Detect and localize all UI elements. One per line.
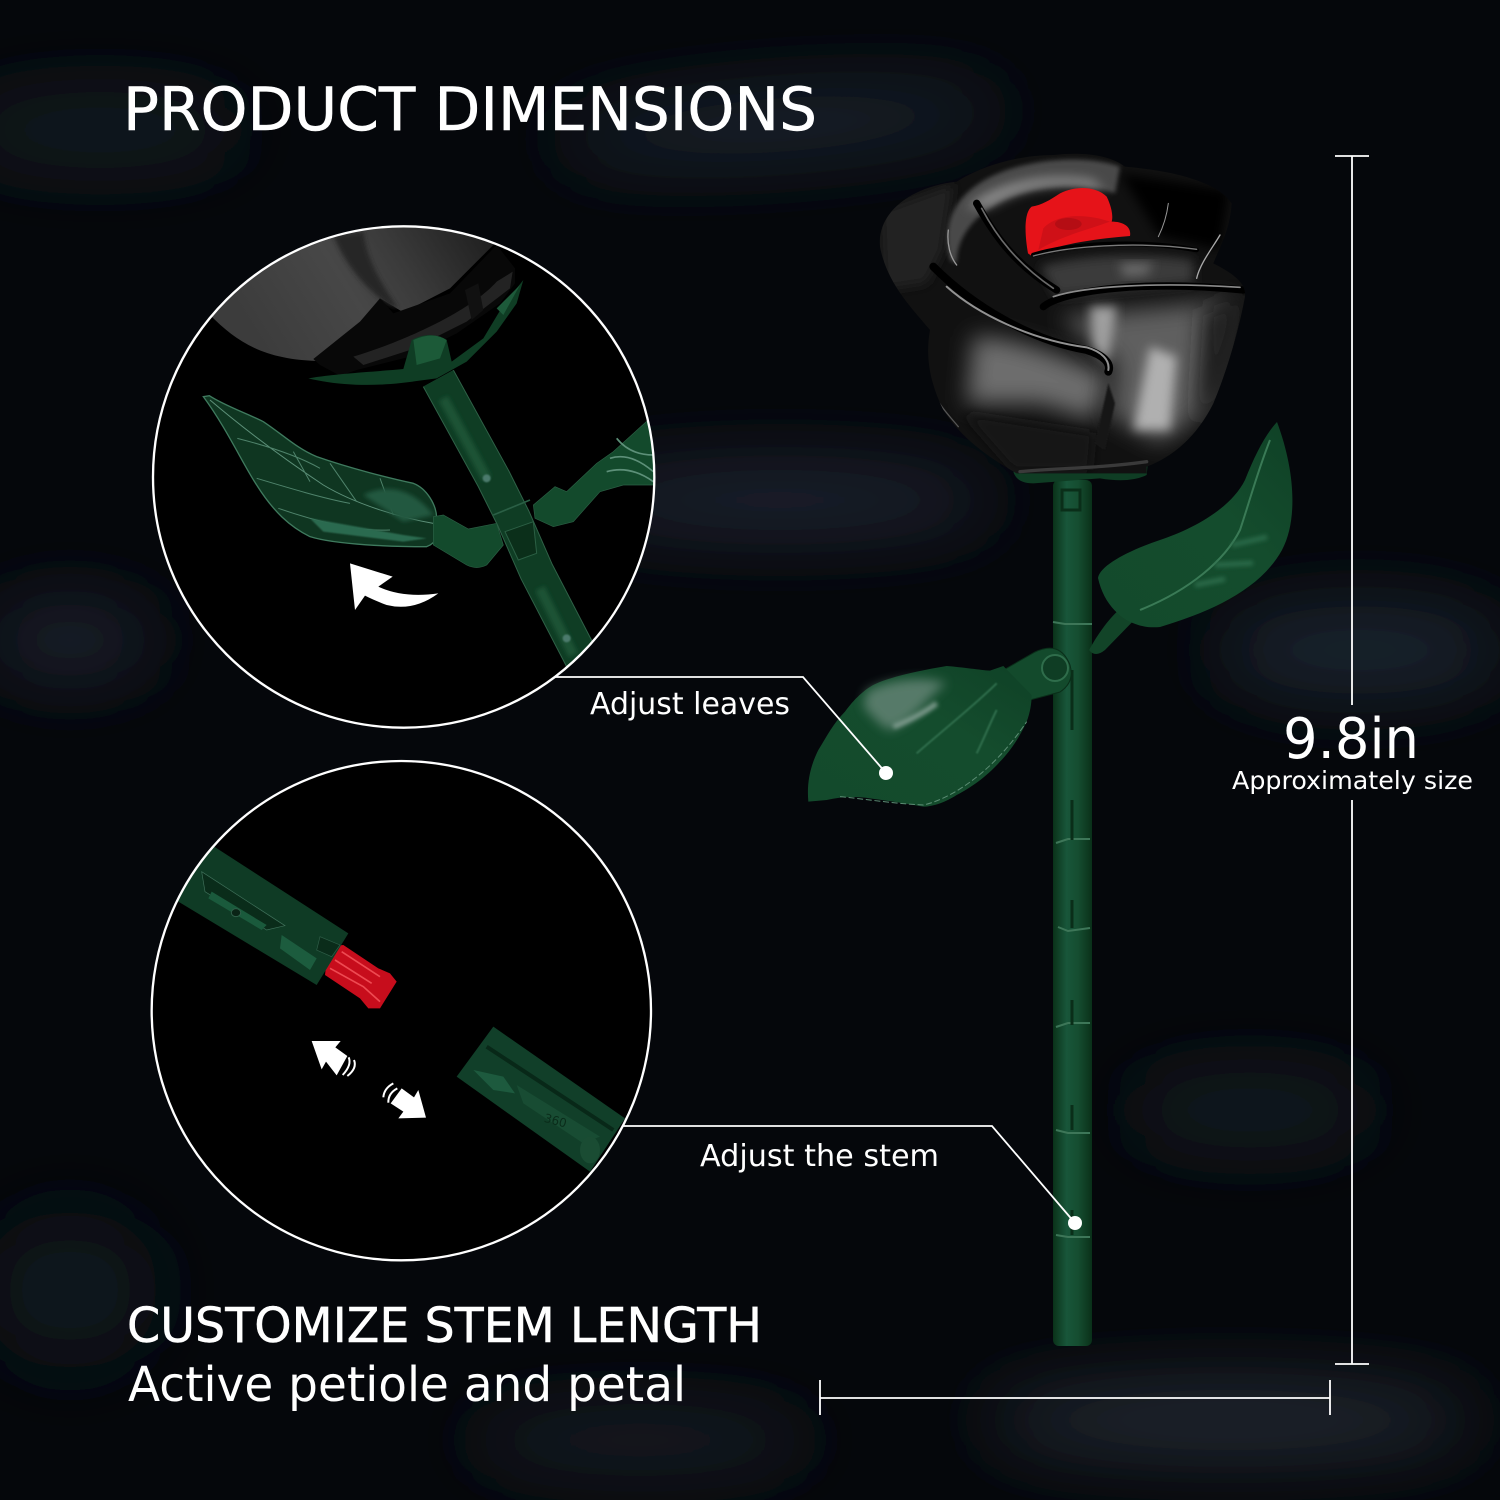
upper right petal shading (1126, 176, 1228, 248)
callout: adjust stem leader line (623, 1126, 1082, 1230)
callout: adjust leaves leader line (555, 677, 893, 780)
leaf joint (1042, 655, 1068, 681)
callout label: adjust leaves: Adjust leaves (590, 687, 790, 722)
left petiole in close-up (433, 515, 503, 567)
width dimension line (820, 1380, 1330, 1415)
right leaf and petiole in close-up (533, 418, 660, 527)
height value: 9.8in (1283, 707, 1419, 772)
left leaf (808, 666, 1032, 807)
height dimension line (1335, 156, 1369, 1364)
stem in close-up (438, 378, 582, 658)
sepals in close-up (308, 280, 523, 385)
lower stem piece (457, 1027, 625, 1172)
lower stem piece: 360 (543, 1111, 568, 1130)
height note: Approximately size (1232, 766, 1473, 795)
red centre bud (1026, 188, 1130, 256)
heading: customize stem length: CUSTOMIZE STEM LENGTH (127, 1298, 762, 1354)
sepals (1013, 458, 1148, 483)
callout label: adjust the stem: Adjust the stem (700, 1139, 939, 1174)
title: PRODUCT DIMENSIONS (123, 75, 817, 145)
left petiole (1000, 648, 1071, 700)
icon: double arrows in and out (312, 1041, 426, 1118)
panel: adjust leaves close-up circle (153, 225, 660, 728)
upper stem piece with red connector (170, 845, 397, 1008)
lower body highlights (963, 293, 1245, 470)
stem (1053, 480, 1092, 1346)
left petal shading (880, 183, 953, 290)
petal silhouette (880, 154, 1245, 473)
rose underside in close-up (210, 225, 515, 376)
petal edge highlights (895, 203, 1243, 472)
upper petals (947, 160, 1193, 297)
right leaf (1089, 422, 1292, 654)
rose head (880, 154, 1245, 483)
icon: curved rotation arrow (350, 563, 438, 610)
subheading: active petiole and petal: Active petiole and petal (128, 1357, 686, 1413)
panel: adjust stem close-up circle (152, 761, 651, 1260)
left leaf in close-up (203, 396, 437, 547)
rose illustration (808, 154, 1292, 1346)
